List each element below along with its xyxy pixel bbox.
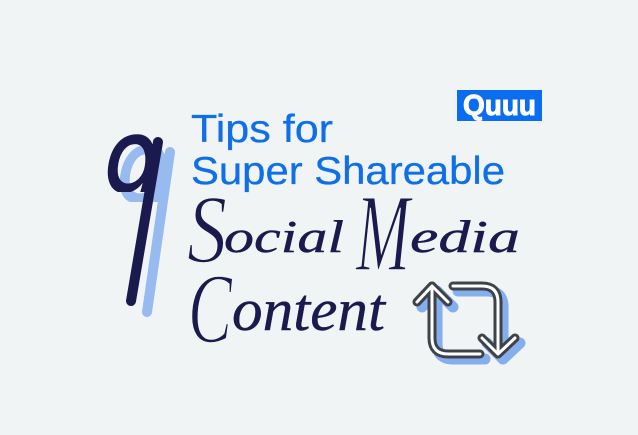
heading: Tips for: Tips for bbox=[191, 108, 333, 151]
numeral 9 with shadow bbox=[108, 134, 175, 317]
script heading: Social Media: M bbox=[355, 172, 413, 294]
script heading: Content: ontent bbox=[232, 277, 386, 343]
infographic canvas bbox=[108, 90, 542, 364]
icon: repost arrows bbox=[417, 286, 520, 359]
numeral 9 with shadow: 9 bbox=[89, 110, 169, 249]
icon highlight bbox=[417, 286, 515, 354]
script heading: Content: C bbox=[188, 253, 233, 364]
numeral 9 with shadow: 9 bbox=[101, 120, 181, 259]
icon shadow bbox=[422, 291, 520, 359]
script heading: Social Media: ocial bbox=[224, 211, 344, 262]
heading: Super Shareable: Super Shareable bbox=[191, 150, 505, 193]
logo: Quuu: Quuu bbox=[463, 90, 536, 122]
script heading: Social Media: edia bbox=[410, 211, 520, 262]
icon outline bbox=[417, 286, 515, 354]
script heading: Social Media: S bbox=[187, 176, 227, 283]
